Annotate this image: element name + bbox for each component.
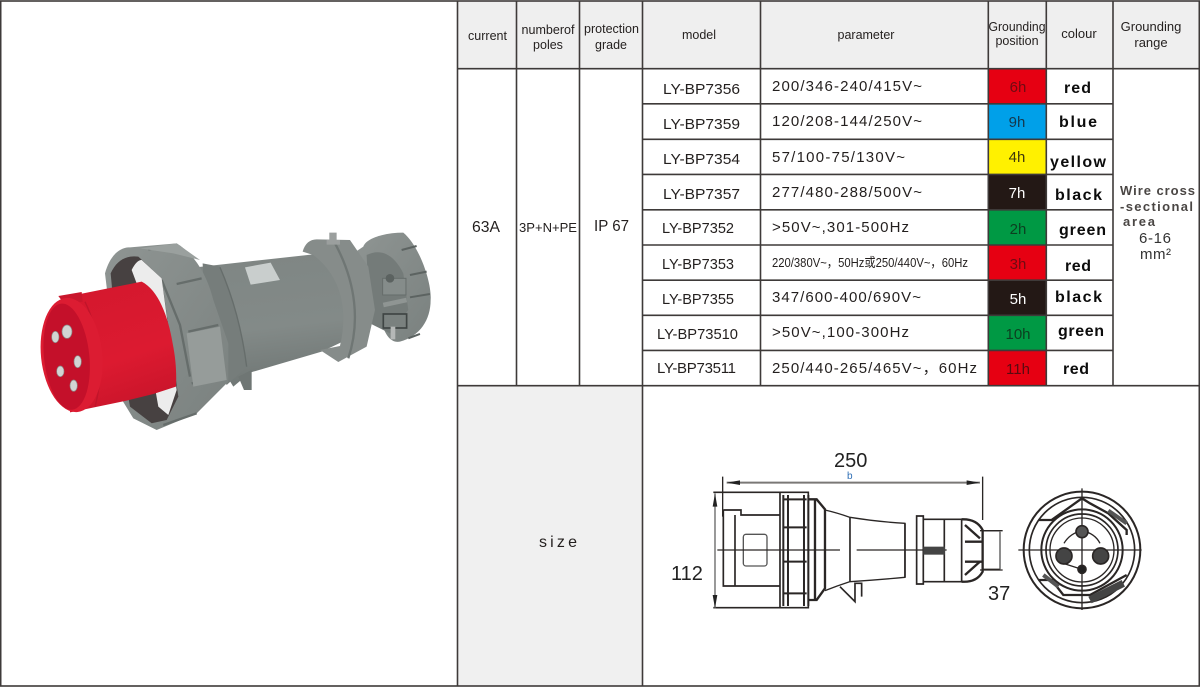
grounding position column: 7h bbox=[1009, 185, 1025, 202]
grounding range text: area bbox=[1123, 214, 1156, 229]
merged cell values: 63A bbox=[472, 219, 500, 236]
grounding range text bbox=[1120, 183, 1195, 263]
model column bbox=[657, 81, 740, 377]
rating label bbox=[245, 263, 280, 285]
main coupling nut bbox=[105, 243, 228, 430]
colour column: red bbox=[1063, 361, 1089, 378]
table header labels bbox=[468, 19, 1181, 52]
parameter column: 250/440-265/465V~，60Hz bbox=[772, 360, 977, 377]
grounding position column: 9h bbox=[1009, 114, 1025, 131]
model column: LY-BP73511 bbox=[657, 360, 736, 377]
panel: size label cell bbox=[457, 386, 643, 686]
model column: LY-BP7359 bbox=[663, 116, 740, 133]
parameter column: 57/100-75/130V~ bbox=[772, 149, 905, 166]
grounding position column bbox=[1005, 79, 1031, 378]
grounding position colour swatches bbox=[989, 69, 1046, 386]
model column: LY-BP7354 bbox=[663, 151, 740, 168]
parameter column: 277/480-288/500V~ bbox=[772, 184, 922, 201]
table header labels: colour bbox=[1061, 26, 1097, 41]
dark interior bbox=[111, 256, 178, 423]
grounding range text: 6-16 bbox=[1139, 230, 1171, 247]
contact pins bbox=[52, 325, 81, 391]
colour column: green bbox=[1059, 222, 1106, 239]
red sleeve bbox=[63, 282, 176, 412]
grounding position column: 3h bbox=[1010, 256, 1026, 273]
table header labels: position bbox=[995, 34, 1039, 48]
foot bbox=[238, 370, 252, 390]
grounding position column: 10h bbox=[1005, 326, 1031, 343]
grounding range text: Wire cross bbox=[1120, 183, 1195, 198]
panel: product photo bbox=[1, 1, 457, 686]
chart: side view dimension drawing bbox=[671, 450, 1000, 608]
merged cell values: IP 67 bbox=[594, 218, 629, 235]
table header labels: model bbox=[682, 28, 716, 42]
parameter column: >50V~,301-500Hz bbox=[772, 219, 909, 236]
merged cell values: 3P+N+PE bbox=[519, 221, 577, 235]
table header labels: Grounding bbox=[988, 20, 1046, 34]
colour column: yellow bbox=[1050, 154, 1107, 171]
grounding position column: 6h bbox=[1010, 79, 1026, 96]
table header labels: numberof bbox=[522, 23, 575, 37]
table header labels: parameter bbox=[838, 28, 894, 42]
colour column: black bbox=[1055, 187, 1102, 204]
parameter column: 120/208-144/250V~ bbox=[772, 113, 922, 130]
colour column: green bbox=[1058, 323, 1104, 340]
colour column bbox=[1050, 80, 1107, 378]
model column: LY-BP7352 bbox=[662, 220, 734, 237]
parameter column: >50V~,100-300Hz bbox=[772, 324, 909, 341]
dimension letter b: b bbox=[847, 471, 853, 482]
icon: industrial plug bbox=[35, 233, 431, 430]
plug face bbox=[35, 295, 108, 415]
parameter column: 220/380V~，50Hz或250/440V~，60Hz bbox=[772, 255, 968, 270]
dimension: 112: 112 bbox=[671, 563, 703, 585]
model column: LY-BP7353 bbox=[662, 256, 734, 273]
dimension: 250: 250 bbox=[834, 450, 867, 472]
colour column: black bbox=[1055, 289, 1102, 306]
table header labels: grade bbox=[595, 38, 627, 52]
model column: LY-BP7356 bbox=[663, 81, 740, 98]
rear cable nut bbox=[353, 233, 431, 342]
table header labels: current bbox=[468, 29, 507, 43]
grounding position column: 5h bbox=[1010, 291, 1026, 308]
table header labels: range bbox=[1134, 35, 1168, 50]
parameter column: 347/600-400/690V~ bbox=[772, 289, 921, 306]
colour column: blue bbox=[1059, 114, 1097, 131]
chart: front view drawing bbox=[980, 488, 1142, 610]
colour column: red bbox=[1064, 80, 1091, 97]
panel: header row bbox=[457, 1, 1199, 69]
screw bbox=[327, 233, 340, 245]
grounding position column: 4h bbox=[1009, 149, 1025, 166]
model column: LY-BP7357 bbox=[663, 186, 740, 203]
model column: LY-BP73510 bbox=[657, 326, 738, 343]
size label: size bbox=[539, 534, 577, 551]
front ring bbox=[203, 263, 247, 385]
rear collar bbox=[303, 239, 375, 362]
colour column: red bbox=[1065, 258, 1091, 275]
table header labels: protection bbox=[584, 22, 639, 36]
grounding position column: 2h bbox=[1010, 221, 1026, 238]
table header labels: poles bbox=[533, 38, 563, 52]
grounding position column: 11h bbox=[1006, 361, 1030, 378]
model column: LY-BP7355 bbox=[662, 291, 734, 308]
parameter column: 200/346-240/415V~ bbox=[772, 78, 922, 95]
grounding range text: -sectional bbox=[1120, 199, 1193, 214]
main tapered body bbox=[187, 254, 353, 387]
grounding range text: mm² bbox=[1140, 246, 1171, 263]
parameter column bbox=[772, 78, 977, 377]
table header labels: Grounding bbox=[1121, 19, 1181, 34]
merged cell values bbox=[472, 218, 629, 236]
dimension: 37: 37 bbox=[988, 583, 1010, 605]
